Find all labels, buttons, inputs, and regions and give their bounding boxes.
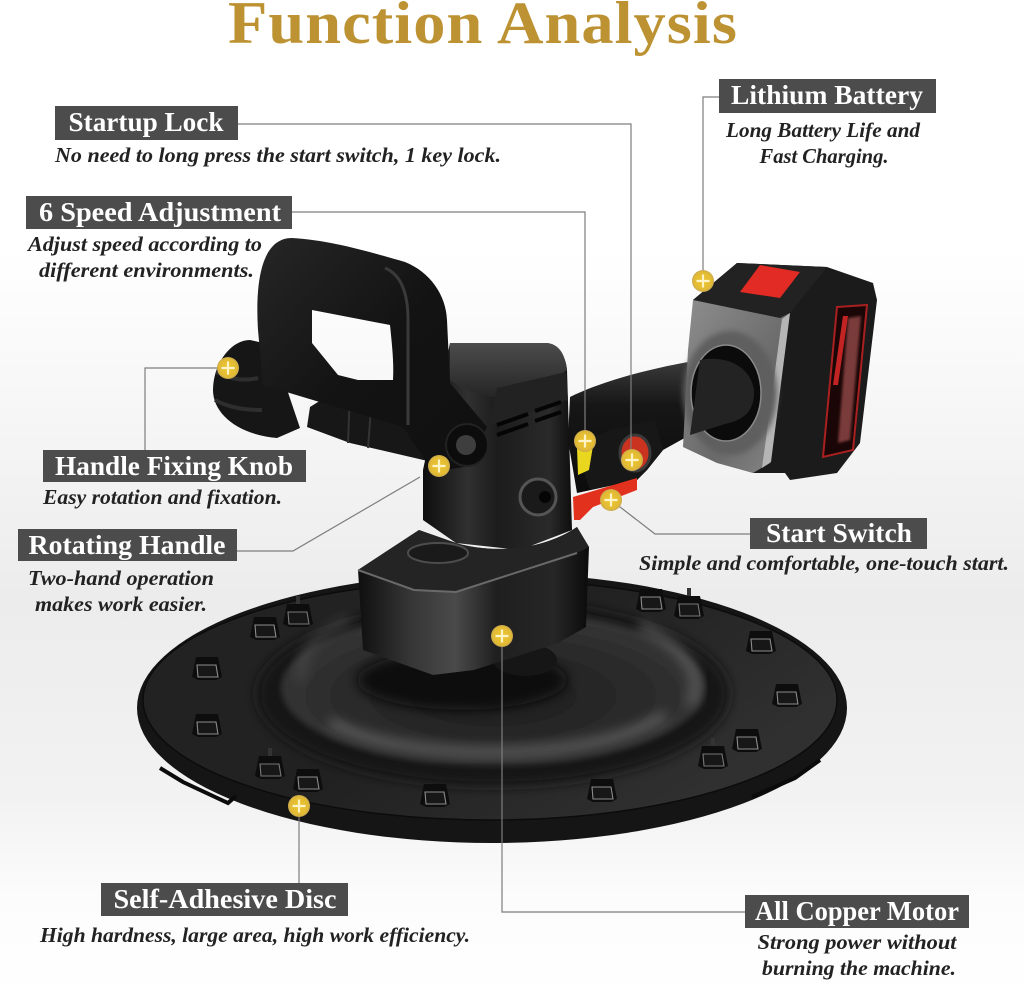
callout: Handle Fixing Knob: Handle Fixing Knob <box>55 451 293 481</box>
callout: Lithium Battery <box>719 79 936 168</box>
callout: Rotating Handle: makes work easier. <box>35 592 207 616</box>
callout: All Copper Motor <box>745 895 969 980</box>
motor housing <box>358 527 589 675</box>
callout: Lithium Battery: Fast Charging. <box>759 144 888 168</box>
callout: Start Switch: Simple and comfortable, one-touch start. <box>639 551 1009 575</box>
callout: 6 Speed Adjustment: Adjust speed according to <box>26 232 262 256</box>
shaft <box>307 380 432 462</box>
lock button <box>620 435 650 471</box>
adhesive disc <box>137 573 847 843</box>
motor head <box>423 343 572 550</box>
start trigger <box>573 478 637 520</box>
callout: Startup Lock: Startup Lock <box>68 107 224 137</box>
callout: All Copper Motor: burning the machine. <box>762 956 956 980</box>
callout: Rotating Handle: Rotating Handle <box>28 530 226 560</box>
callout: All Copper Motor: All Copper Motor <box>755 896 959 926</box>
battery window <box>823 305 867 457</box>
callout: Self-Adhesive Disc: Self-Adhesive Disc <box>114 884 337 914</box>
callout: 6 Speed Adjustment: 6 Speed Adjustment <box>39 197 281 227</box>
fixing knob <box>213 340 300 438</box>
callout: Handle Fixing Knob <box>42 450 306 509</box>
speed dial <box>577 446 593 475</box>
callout: Self-Adhesive Disc <box>39 883 470 947</box>
pivot bolt <box>446 424 488 466</box>
callout: Start Switch: Start Switch <box>766 518 912 548</box>
rear handle <box>568 358 745 493</box>
callout: Handle Fixing Knob: Easy rotation and fixation. <box>42 485 282 509</box>
battery pack <box>683 263 877 480</box>
callout: Start Switch <box>639 518 1009 575</box>
callout: Startup Lock <box>54 106 501 167</box>
callout: Self-Adhesive Disc: High hardness, large area, high work efficiency. <box>39 923 470 947</box>
marker dots <box>217 270 714 817</box>
product illustration: floor tile tool <box>137 238 877 843</box>
callout: Startup Lock: No need to long press the start switch, 1 key lock. <box>54 143 501 167</box>
leader lines <box>145 97 750 912</box>
disc studs <box>192 588 802 807</box>
callout: 6 Speed Adjustment <box>26 196 292 282</box>
callout: 6 Speed Adjustment: different environments. <box>39 258 254 282</box>
rotating handle <box>257 238 487 472</box>
callout: Lithium Battery: Lithium Battery <box>731 80 923 110</box>
callout: Rotating Handle: Two-hand operation <box>28 566 214 590</box>
callout: All Copper Motor: Strong power without <box>758 930 958 954</box>
callout: Lithium Battery: Long Battery Life and <box>725 118 921 142</box>
head vents <box>497 402 561 435</box>
callout: Rotating Handle <box>18 529 237 616</box>
side port <box>520 479 556 515</box>
battery red latch <box>740 265 800 298</box>
